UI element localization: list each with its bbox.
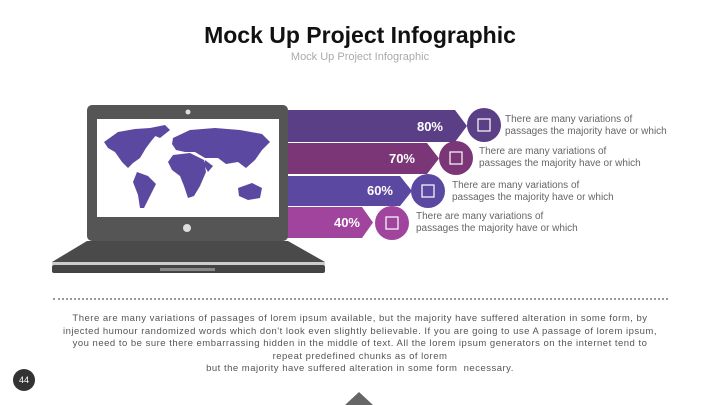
body paragraph: There are many variations of passages of lorem ipsum available, but the majority have suffered alteration in some form, by [72, 313, 648, 324]
page number badge: 44 [19, 375, 29, 385]
description 3 [452, 180, 614, 203]
body paragraph [63, 313, 657, 374]
body paragraph: you need to be sure there embarrassing hidden in the middle of text. All the lorem ipsum generators on the internet tend to [73, 338, 647, 349]
world map [104, 125, 270, 208]
description 1: passages the majority have or which [505, 126, 667, 137]
icon circle 1 [467, 108, 501, 142]
bar 70% [285, 143, 439, 174]
bar 60% [285, 176, 412, 206]
description 3: There are many variations of [452, 180, 579, 191]
description 2: There are many variations of [479, 146, 606, 157]
bar 80% [285, 110, 467, 142]
page number badge [13, 369, 35, 391]
bar 40%: 40% [334, 215, 360, 230]
description 1: There are many variations of [505, 114, 632, 125]
description 1 [505, 114, 667, 137]
body paragraph: repeat predefined chunks as of lorem [273, 351, 447, 362]
description 2 [479, 146, 641, 169]
description 2: passages the majority have or which [479, 158, 641, 169]
body paragraph: but the majority have suffered alteration in some form necessary. [206, 363, 514, 374]
description 4 [416, 211, 578, 234]
bar 60%: 60% [367, 183, 393, 198]
icon circle 2 [439, 141, 473, 175]
laptop [52, 105, 325, 273]
body paragraph: injected humour randomized words which don't look even slightly believable. If you are going to use A passage of lorem ipsum, [63, 326, 657, 337]
bar 40% [285, 207, 373, 238]
bar 80%: 80% [417, 119, 443, 134]
icon circle 4 [375, 206, 409, 240]
bar 70%: 70% [389, 151, 415, 166]
description 4: passages the majority have or which [416, 223, 578, 234]
subtitle: Mock Up Project Infographic [291, 51, 429, 63]
description 4: There are many variations of [416, 211, 543, 222]
icon circle 3 [411, 174, 445, 208]
chart: laptop with percentage bars [52, 105, 501, 273]
description 3: passages the majority have or which [452, 192, 614, 203]
bottom triangle marker [345, 392, 373, 405]
title: Mock Up Project Infographic [204, 22, 516, 48]
